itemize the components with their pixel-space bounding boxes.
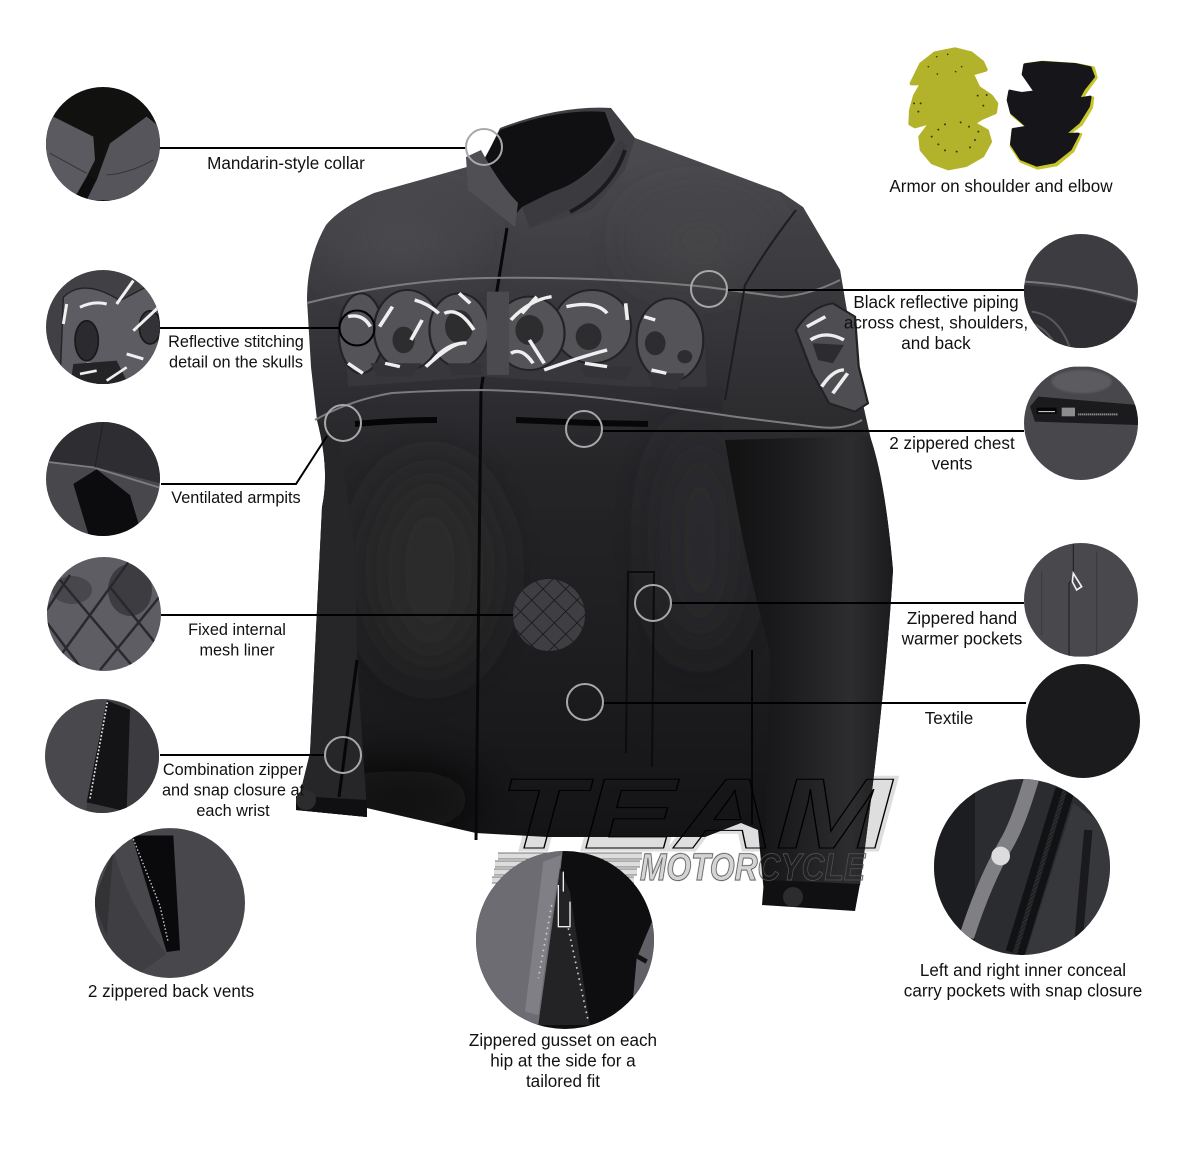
label: skulls: Reflective stitching <box>168 333 304 351</box>
detail: quilted liner <box>47 557 161 671</box>
skull marker <box>340 310 374 346</box>
hip zipper <box>751 650 753 825</box>
mesh liner cutout <box>513 579 585 651</box>
label: hand pockets: Zippered hand <box>907 609 1017 628</box>
armhole seam <box>725 210 796 400</box>
callout markers on jacket <box>325 129 727 773</box>
label: chest vents: vents <box>932 454 972 474</box>
label: back vents: 2 zippered back vents <box>88 982 254 1001</box>
collar <box>466 108 635 228</box>
hand pocket <box>626 572 654 767</box>
label: wrist closure: and snap closure at <box>162 782 305 800</box>
left chest zipper <box>355 420 437 424</box>
label: armor: Armor on shoulder and elbow <box>889 177 1113 196</box>
jacket silhouette <box>296 138 893 893</box>
watermark logo overlay: MOTORCYCLE <box>640 847 866 889</box>
skull band <box>339 290 707 390</box>
label: hip gusset: tailored fit <box>526 1072 600 1091</box>
jacket illustration <box>296 108 893 911</box>
label: wrist closure: each wrist <box>196 802 270 820</box>
label: inner pockets: carry pockets with snap closure <box>904 982 1142 1000</box>
black armor pad <box>1008 62 1096 168</box>
right sleeve <box>725 436 893 893</box>
armor vent holes <box>913 53 988 153</box>
detail: armpit <box>43 421 163 540</box>
label: collar: Mandarin-style collar <box>207 154 365 173</box>
detail: chest vent <box>1023 367 1140 482</box>
left sleeve <box>296 420 367 817</box>
detail: hip gusset <box>476 851 654 1029</box>
sleeve skull patch <box>796 303 868 412</box>
label: mesh liner: mesh liner <box>199 642 275 660</box>
detail: wrist zipper <box>43 699 163 817</box>
right chest zipper <box>516 420 648 424</box>
label: hip gusset: Zippered gusset on each <box>469 1031 657 1050</box>
label: piping: and back <box>901 334 971 353</box>
detail: back vent <box>93 828 247 980</box>
wrist zipper <box>339 660 357 797</box>
detail: reflective skull <box>43 269 163 389</box>
detail: textile <box>1026 664 1140 778</box>
watermark logo overlay: TEAM <box>499 758 895 870</box>
watermark logo background: TEAM <box>499 758 895 870</box>
left cuff <box>296 796 367 817</box>
label: wrist closure: Combination zipper <box>163 761 303 779</box>
label: mesh liner: Fixed internal <box>188 621 286 639</box>
cuff snaps <box>296 790 316 810</box>
right cuff <box>762 880 860 911</box>
label: piping: across chest, shoulders, <box>844 314 1028 332</box>
label: piping: Black reflective piping <box>853 293 1019 312</box>
reflective piping <box>307 278 862 428</box>
label: hand pockets: warmer pockets <box>901 630 1022 648</box>
watermark logo overlay <box>499 758 895 889</box>
detail: inner pocket <box>932 777 1112 957</box>
detail: reflective piping <box>1023 233 1140 348</box>
leader lines <box>159 148 1026 755</box>
detail: hand pocket <box>1023 542 1140 657</box>
yellow armor pad <box>910 49 996 168</box>
fabric shading <box>320 210 760 830</box>
label: hip gusset: hip at the side for a <box>490 1052 636 1070</box>
watermark logo background <box>492 758 895 889</box>
label: chest vents: 2 zippered chest <box>889 434 1015 453</box>
labels <box>88 154 1142 1091</box>
label: armpits: Ventilated armpits <box>171 489 301 507</box>
armor pads <box>910 49 1096 168</box>
label: textile: Textile <box>925 709 973 728</box>
watermark logo background: MOTORCYCLE <box>640 847 866 889</box>
right sleeve cap <box>722 207 871 453</box>
label: skulls: detail on the skulls <box>169 354 303 372</box>
label: inner pockets: Left and right inner conceal <box>920 961 1126 980</box>
detail: collar <box>43 87 163 203</box>
front zipper <box>476 228 507 840</box>
